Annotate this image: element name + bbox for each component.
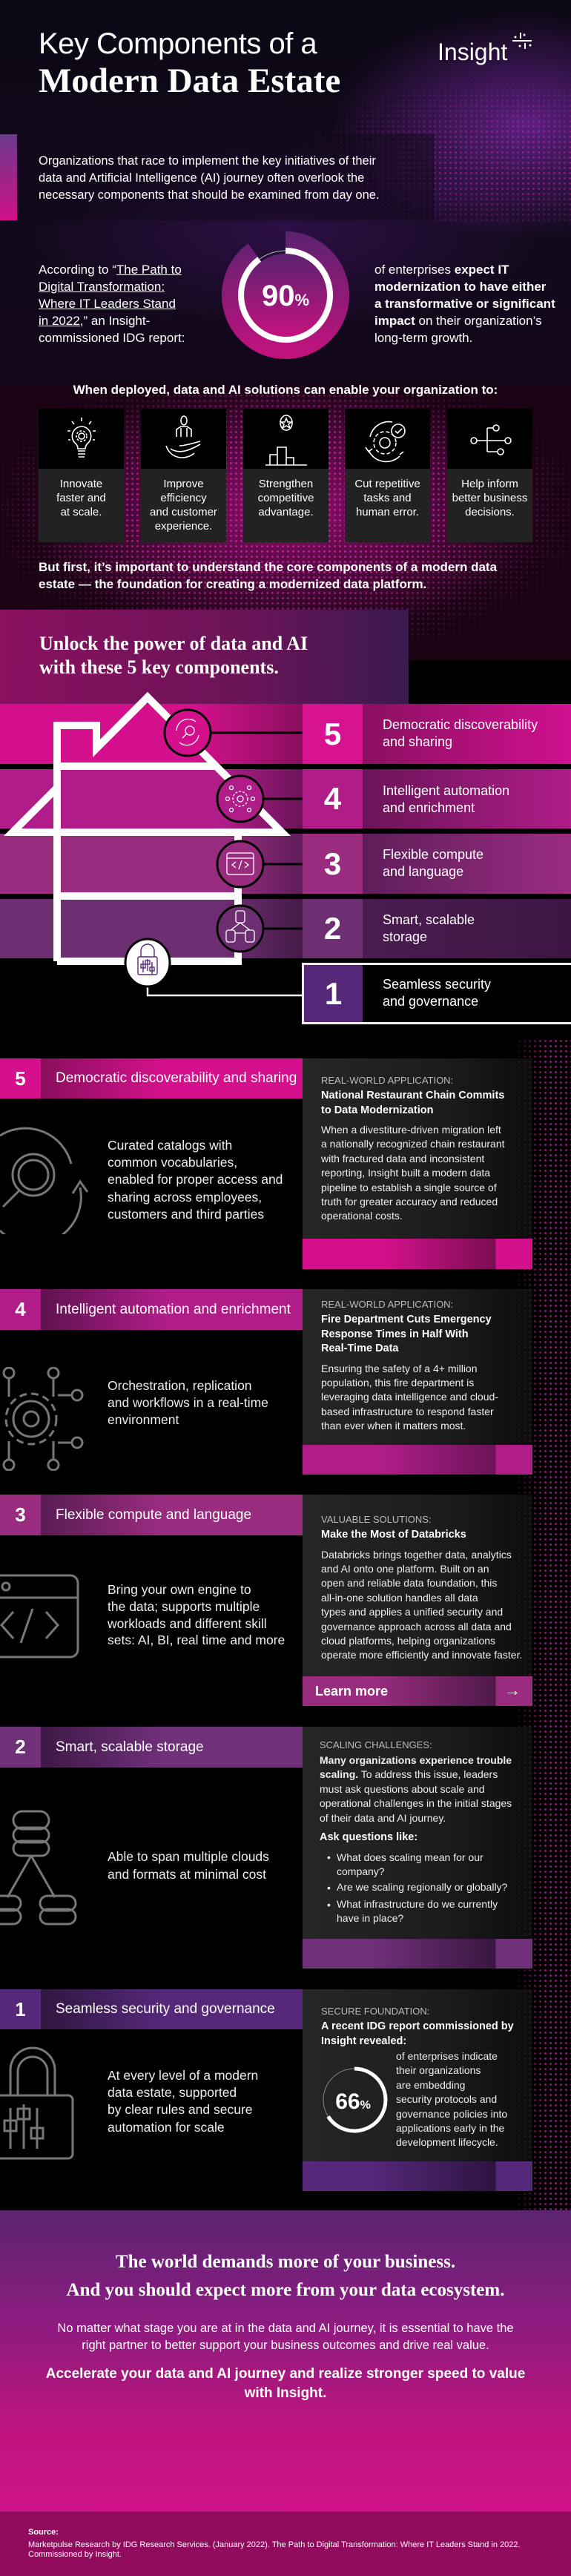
band 3: and language	[383, 864, 463, 879]
header bar	[0, 1495, 303, 1535]
background: top purple glow	[0, 0, 571, 415]
callout card: When a divestiture-driven migration left	[321, 1124, 501, 1136]
callout card: of enterprises indicate	[396, 2050, 498, 2062]
callout card: •	[327, 1899, 331, 1911]
logo: Insight: Insight	[438, 39, 507, 65]
callout card	[303, 1727, 532, 1939]
icon: code window	[0, 1574, 79, 1658]
callout card: operate more efficiently and innovate faster.	[321, 1649, 522, 1661]
intro panel	[0, 134, 435, 220]
callout card: population, this fire department is	[321, 1377, 474, 1389]
icon: podium star	[265, 415, 307, 466]
icon circle 2	[217, 906, 263, 952]
callout card: and AI onto one platform. Built on an	[321, 1563, 489, 1575]
body text: environment	[108, 1412, 179, 1427]
band 4: and enrichment	[383, 800, 475, 815]
chart: 66% ring	[323, 2066, 387, 2133]
band 4: Intelligent automation	[383, 783, 509, 798]
callout card: with fractured data and inconsistent	[321, 1153, 484, 1165]
stat: right text: impact on their organization’s	[374, 314, 542, 328]
header bar: 2	[15, 1736, 26, 1758]
callout card: VALUABLE SOLUTIONS:	[321, 1514, 432, 1525]
closing headline: The world demands more of your business.	[116, 2252, 455, 2272]
callout card: open and reliable data foundation, this	[321, 1577, 497, 1589]
callout card: of their data and AI journey.	[320, 1812, 446, 1824]
header bar: 4	[15, 1298, 26, 1320]
callout card: than ever when it matters most.	[321, 1420, 466, 1432]
header bar: Intelligent automation and enrichment	[56, 1302, 291, 1317]
logo: Insight	[438, 33, 532, 65]
callout card: leveraging data intelligence and cloud-	[321, 1391, 498, 1403]
body text	[108, 1138, 283, 1222]
icon: search cycle	[0, 1127, 89, 1234]
header bar	[0, 1058, 303, 1098]
text: but first	[39, 560, 497, 591]
callout card: must ask questions about scale and	[320, 1783, 485, 1795]
card bottom bar	[303, 1239, 532, 1269]
connectors	[188, 733, 303, 929]
body text: automation for scale	[108, 2120, 225, 2135]
callout card: operational challenges in the initial stages	[320, 1797, 512, 1809]
callout card: scaling. To address this issue, leaders	[320, 1768, 498, 1780]
body text: Curated catalogs with	[108, 1138, 232, 1153]
section 4	[0, 1289, 532, 1475]
band 2: storage	[383, 929, 427, 944]
stat: left text: commissioned IDG report:	[39, 331, 185, 345]
band 5	[0, 704, 571, 764]
call to action	[46, 2366, 525, 2401]
body text	[108, 1582, 285, 1647]
body text: data estate, supported	[108, 2085, 237, 2100]
icon: tree diagram	[470, 424, 512, 455]
icon circle 3	[217, 841, 263, 887]
band 1 box: 1	[325, 976, 342, 1011]
callout card: Ask questions like:	[320, 1831, 417, 1843]
callout card: to Data Modernization	[321, 1104, 433, 1116]
callout card: their organizations	[396, 2064, 481, 2076]
callout card: truth for greater accuracy and reduced	[321, 1196, 498, 1208]
panel: unlock heading: with these 5 key components.	[39, 656, 279, 678]
intro text: necessary components that should be examined from day one.	[39, 188, 380, 202]
callout card: pipeline to establish a single source of	[321, 1182, 497, 1193]
header bar	[0, 1989, 303, 2029]
band 1 box: and governance	[383, 994, 478, 1009]
card: efficiency	[141, 409, 226, 542]
closing headline: And you should expect more from your data ecosystem.	[67, 2280, 504, 2300]
callout card: based infrastructure to respond faster	[321, 1406, 494, 1417]
card: competitive: advantage.	[258, 506, 314, 518]
callout card: have in place?	[337, 1912, 403, 1924]
card: efficiency: Improve	[163, 478, 204, 490]
body text: sharing across employees,	[108, 1190, 262, 1205]
card bottom bar	[303, 1939, 532, 1969]
band 4	[0, 769, 571, 829]
title	[39, 27, 340, 100]
footer panel: closing	[0, 2210, 571, 2511]
band 5: and sharing	[383, 734, 452, 749]
band 2: 2	[324, 911, 341, 946]
section 2	[0, 1727, 532, 1969]
header bar: 3	[15, 1503, 26, 1526]
body text	[108, 2068, 258, 2135]
band 3: 3	[324, 846, 341, 881]
band 4: 4	[324, 781, 341, 816]
callout card: REAL-WORLD APPLICATION:	[321, 1299, 453, 1310]
text: but first: estate — the foundation for creating a modernized data platform.	[39, 577, 426, 591]
benefit cards	[39, 409, 532, 542]
source footer: Commissioned by Insight.	[28, 2550, 122, 2559]
card: efficiency: and customer	[150, 506, 217, 518]
stat: right text: of enterprises expect IT	[374, 263, 509, 277]
source footer: Marketpulse Research by IDG Research Services. (January 2022). The Path to Digital Transformation: Where IT Leaders Stand in 2022.	[28, 2540, 521, 2549]
stat: left text: Where IT Leaders Stand	[39, 297, 176, 311]
section 1	[0, 1989, 532, 2191]
body text: Bring your own engine to	[108, 1582, 251, 1597]
source footer	[0, 2511, 571, 2576]
body text: and workflows in a real-time	[108, 1395, 268, 1410]
callout card: REAL-WORLD APPLICATION:	[321, 1075, 453, 1086]
closing body: No matter what stage you are at in the data and AI journey, it is essential to have the	[57, 2322, 514, 2335]
body text: Orchestration, replication	[108, 1378, 252, 1393]
callout card: Are we scaling regionally or globally?	[337, 1881, 507, 1893]
body text: workloads and different skill	[108, 1616, 267, 1631]
section 3	[0, 1495, 532, 1706]
header bar: Flexible compute and language	[56, 1507, 251, 1523]
callout card: Databricks brings together data, analytics	[321, 1549, 512, 1561]
callout card: •	[327, 1851, 331, 1863]
callout card: •	[327, 1882, 331, 1894]
icon: arrow: →	[504, 1681, 521, 1699]
chart: 90% donut	[222, 231, 349, 359]
callout card: governance policies into	[396, 2108, 507, 2120]
body text: customers and third parties	[108, 1207, 264, 1222]
callout card: Insight revealed:	[321, 2035, 406, 2047]
text: but first: But first, it’s important to understand the core components of a modern data	[39, 560, 497, 574]
icon: hand with person	[165, 415, 200, 458]
card: competitive	[243, 409, 329, 542]
icon: database stack	[0, 1810, 77, 1926]
section 5	[0, 1058, 532, 1269]
header bar: 5	[15, 1067, 26, 1090]
card bottom bar	[303, 2161, 532, 2191]
band 3: Flexible compute	[383, 847, 483, 862]
house outline	[4, 692, 303, 997]
card: decisions: Help inform	[461, 478, 518, 490]
stat: left text	[39, 263, 185, 345]
intro text: Organizations that race to implement the key initiatives of their	[39, 154, 376, 168]
card: cut repetitive: human error.	[356, 506, 419, 518]
body text: sets: AI, BI, real time and more	[108, 1633, 285, 1647]
icon circle 5	[165, 710, 211, 756]
title: Key Components of a	[39, 27, 317, 60]
component bands diagram	[0, 692, 571, 1024]
card: efficiency: efficiency	[160, 492, 207, 504]
callout card: applications early in the	[396, 2122, 504, 2134]
callout card: A recent IDG report commissioned by	[321, 2020, 514, 2032]
body text: Able to span multiple clouds	[108, 1849, 269, 1864]
header bar: Seamless security and governance	[56, 2001, 275, 2017]
icon: lock	[0, 2047, 74, 2160]
icon: lightbulb	[67, 418, 96, 458]
header bar: 1	[15, 1998, 26, 2020]
stat: left text: Digital Transformation:	[39, 280, 165, 294]
callout card: SECURE FOUNDATION:	[321, 2006, 429, 2017]
intro text: data and Artificial Intelligence (AI) journey often overlook the	[39, 171, 364, 185]
heading: benefits: When deployed, data and AI solutions can enable your organization to:	[73, 383, 498, 397]
panel: unlock heading: Unlock the power of data and AI	[39, 633, 308, 654]
background: wave dots top	[310, 75, 571, 221]
card: cut repetitive: Cut repetitive	[354, 478, 420, 490]
callout card: What infrastructure do we currently	[337, 1898, 498, 1910]
body text: common vocabularies,	[108, 1155, 237, 1170]
chart: 66% ring: 66%	[335, 2089, 371, 2114]
stat: right text: modernization to have either	[374, 280, 546, 294]
callout card: Real-Time Data	[321, 1343, 399, 1354]
callout card: Make the Most of Databricks	[321, 1529, 466, 1541]
callout card: types and applies a unified security and	[321, 1606, 503, 1618]
band 5: Democratic discoverability	[383, 717, 538, 732]
panel: unlock heading	[0, 610, 409, 704]
header bar: Democratic discoverability and sharing	[56, 1070, 297, 1086]
body text: enabled for proper access and	[108, 1172, 283, 1187]
callout card: SCALING CHALLENGES:	[320, 1739, 432, 1750]
title: Modern Data Estate	[39, 62, 340, 100]
stat: left text: According to “The Path to	[39, 263, 182, 277]
closing body: right partner to better support your business outcomes and drive real value.	[82, 2339, 489, 2352]
icon: gear network	[3, 1367, 83, 1471]
callout card: cloud platforms, helping organizations	[321, 1635, 495, 1647]
card: cut repetitive: tasks and	[363, 492, 412, 504]
card: competitive: competitive	[258, 492, 314, 504]
header bar: Smart, scalable storage	[56, 1739, 204, 1755]
source footer: Source:	[28, 2528, 59, 2537]
icon: gear check cycle	[365, 421, 406, 463]
card: decisions: better business	[452, 492, 527, 504]
closing body	[57, 2322, 514, 2352]
background: magenta swirl	[0, 386, 571, 660]
stat: right text: a transformative or significant	[374, 297, 555, 311]
body text	[108, 1849, 269, 1882]
callout card: What does scaling mean for our	[337, 1851, 483, 1863]
card: innovate: faster and	[56, 492, 106, 504]
card: innovate	[39, 409, 124, 542]
intro text	[39, 154, 380, 202]
icon: lock circle	[125, 939, 170, 986]
stat: right text	[374, 263, 555, 345]
learn more button	[303, 1676, 532, 1706]
band 2: Smart, scalable	[383, 912, 475, 927]
call to action: Accelerate your data and AI journey and realize stronger speed to value	[46, 2366, 525, 2382]
header bar	[0, 1727, 303, 1768]
body text: and formats at minimal cost	[108, 1867, 266, 1882]
body text: the data; supports multiple	[108, 1599, 260, 1614]
callout card: National Restaurant Chain Commits	[321, 1090, 504, 1101]
band 5: 5	[324, 717, 341, 751]
callout card	[303, 1058, 532, 1239]
closing headline	[67, 2252, 504, 2300]
accent bar	[0, 134, 17, 220]
band 3	[0, 834, 571, 894]
stat: left text: in 2022,” an Insight-	[39, 314, 150, 328]
icon circle 4	[217, 776, 263, 822]
callout card: a nationally recognized chain restaurant	[321, 1138, 504, 1150]
body text	[108, 1378, 268, 1427]
callout card	[303, 1495, 532, 1676]
callout card	[303, 1289, 532, 1445]
callout card: Many organizations experience trouble	[320, 1754, 512, 1766]
header bar	[0, 1289, 303, 1330]
callout card: Ensuring the safety of a 4+ million	[321, 1362, 478, 1374]
callout card: Response Times in Half With	[321, 1328, 469, 1340]
background: right dot column	[512, 1038, 571, 2210]
callout card: security protocols and	[396, 2093, 497, 2105]
body text: At every level of a modern	[108, 2068, 258, 2083]
callout card: development lifecycle.	[396, 2136, 498, 2148]
card: decisions: decisions.	[465, 506, 515, 518]
card: decisions	[447, 409, 532, 542]
band 1 box: Seamless security	[383, 977, 491, 992]
learn more button: Learn more	[315, 1684, 388, 1699]
card: innovate: Innovate	[60, 478, 102, 490]
card: efficiency: experience.	[155, 520, 212, 533]
callout card: operational costs.	[321, 1210, 403, 1222]
callout card	[303, 1989, 532, 2161]
call to action: with Insight.	[245, 2385, 326, 2401]
callout card: company?	[337, 1865, 385, 1877]
body text: by clear rules and secure	[108, 2102, 253, 2117]
band 2	[0, 899, 571, 958]
chart: 90% donut: 90%	[262, 280, 309, 312]
band 1 box	[302, 963, 571, 1024]
callout card: reporting, Insight built a modern data	[321, 1167, 490, 1179]
callout card: Fire Department Cuts Emergency	[321, 1314, 492, 1325]
card: competitive: Strengthen	[259, 478, 313, 490]
card: innovate: at scale.	[61, 506, 102, 518]
callout card: all-in-one solution handles all data	[321, 1592, 478, 1604]
callout card: are embedding	[396, 2079, 465, 2091]
stat: right text: long-term growth.	[374, 331, 472, 345]
card: cut repetitive	[345, 409, 430, 542]
callout card: governance approach across all data and	[321, 1621, 512, 1633]
card bottom bar	[303, 1445, 532, 1475]
